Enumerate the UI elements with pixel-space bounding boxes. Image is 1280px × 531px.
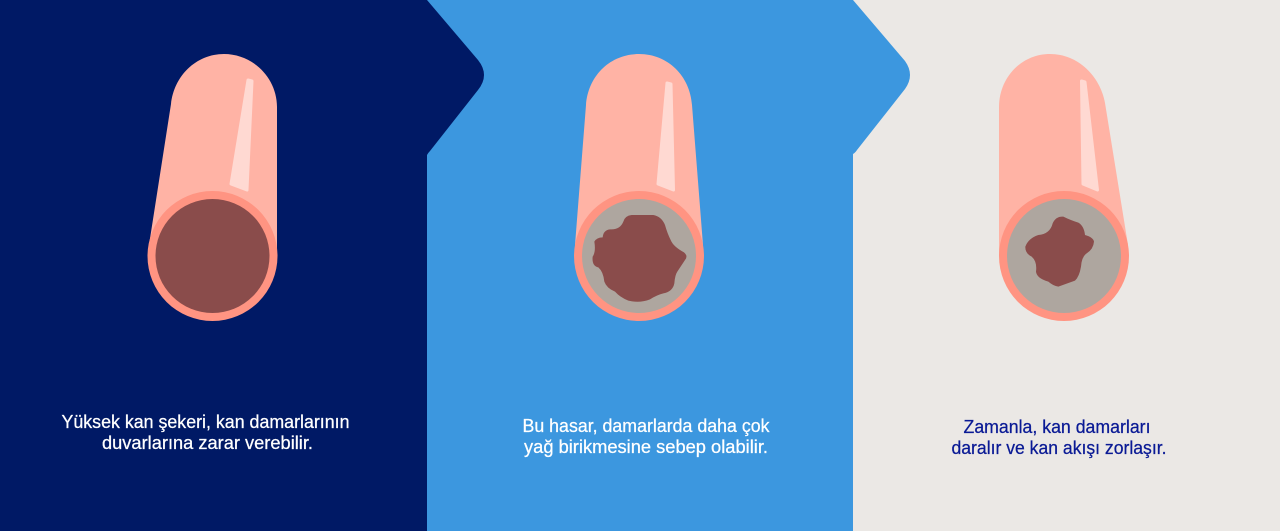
caption: panel 1 (62, 412, 350, 453)
panel: blue background with arrow (427, 0, 910, 531)
caption: panel 1: duvarlarına zarar verebilir. (102, 433, 313, 453)
artery 2: vessel with plaque (574, 54, 704, 321)
artery 1: healthy vessel (148, 54, 278, 321)
artery 3: severely narrowed vessel (999, 54, 1129, 321)
panel: beige background (853, 0, 1280, 531)
narrowed lumen (593, 215, 686, 302)
lumen (156, 199, 270, 313)
caption: panel 2 (522, 416, 770, 457)
narrowed lumen (1025, 217, 1094, 287)
vessel body (149, 54, 277, 256)
vessel opening ring (999, 191, 1129, 321)
caption: panel 3: daralır ve kan akışı zorlaşır. (952, 438, 1166, 458)
panel: navy background with arrow (0, 0, 484, 531)
plaque layer (1007, 199, 1121, 313)
caption: panel 1: Yüksek kan şekeri, kan damarlarının (62, 412, 350, 432)
vessel opening ring (148, 191, 278, 321)
caption: panel 2: Bu hasar, damarlarda daha çok (522, 416, 770, 436)
vessel body (575, 54, 703, 256)
vessel opening ring (574, 191, 704, 321)
plaque layer (582, 199, 696, 313)
vessel body (999, 54, 1128, 256)
highlight (231, 80, 252, 190)
highlight (658, 83, 674, 190)
caption: panel 3 (952, 417, 1166, 458)
caption: panel 3: Zamanla, kan damarları (964, 417, 1150, 437)
highlight (1082, 81, 1098, 190)
caption: panel 2: yağ birikmesine sebep olabilir. (524, 437, 768, 457)
